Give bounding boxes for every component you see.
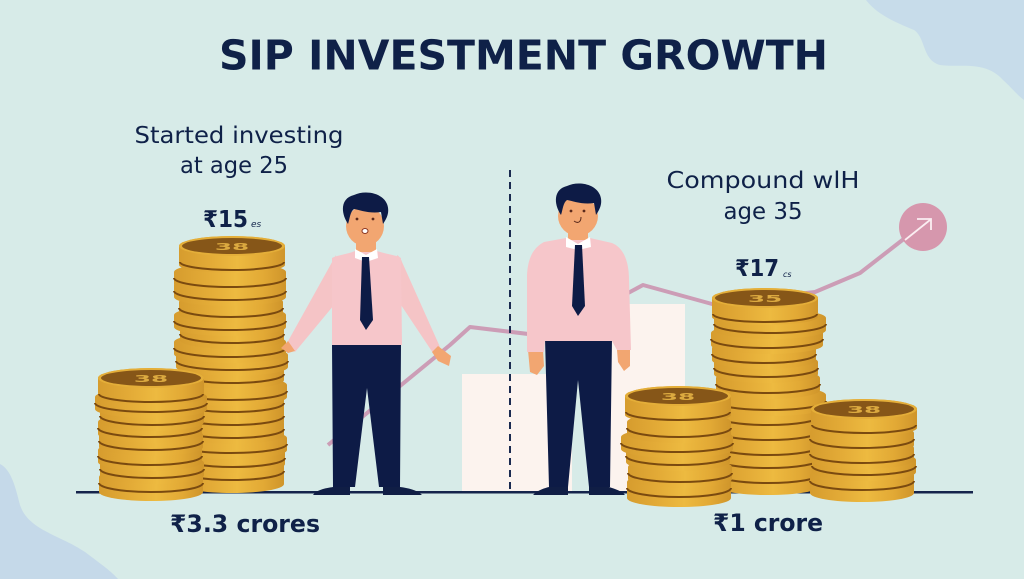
left panel caption: Started investing [134, 123, 344, 149]
face [346, 206, 384, 246]
neck and collar [356, 240, 376, 252]
shirt [527, 238, 631, 352]
right panel caption: age 35 [724, 199, 802, 225]
coin numeral: 35 [748, 294, 782, 305]
tie [572, 245, 585, 316]
right panel caption: Compound wlH [666, 168, 860, 194]
hands [528, 350, 630, 375]
eyes and mouth [356, 218, 358, 220]
trousers [545, 338, 612, 487]
shoes [533, 487, 625, 495]
face [558, 196, 598, 236]
person: right investor [527, 183, 631, 495]
trousers [332, 344, 401, 487]
tie [360, 257, 373, 330]
right amount label: ₹17 [735, 256, 779, 282]
right panel caption [666, 168, 860, 225]
right total label: ₹1 crore [713, 509, 823, 537]
bar chart backdrop [462, 304, 685, 491]
right amount label: cs [783, 270, 792, 279]
left amount label: es [251, 220, 262, 230]
coin stack: right small [810, 399, 917, 502]
title: SIP INVESTMENT GROWTH [219, 32, 828, 80]
hands [281, 341, 451, 366]
left amount label: ₹15 [203, 207, 248, 233]
icon: arrow circle [899, 203, 947, 251]
baseline [76, 491, 973, 494]
coin stack: right left [621, 386, 733, 507]
coin numeral: 38 [215, 242, 249, 253]
divider: dashed [509, 170, 511, 491]
arms [287, 255, 440, 353]
person: left investor [281, 192, 451, 495]
coin numeral: 38 [661, 392, 695, 403]
neck and collar [568, 228, 588, 240]
hair [556, 183, 601, 215]
coin numeral: 38 [134, 374, 168, 385]
decorative blob: bottom left [0, 464, 118, 579]
coin stack: right tall [711, 288, 826, 495]
growth trend line with arrow [328, 203, 947, 445]
eyes and mouth [570, 210, 572, 212]
coin stack: left tall [174, 236, 288, 493]
left panel caption: at age 25 [180, 153, 288, 179]
shoes [313, 487, 422, 495]
decorative blob: top right [866, 0, 1024, 100]
coin numeral: 38 [847, 405, 881, 416]
hair [343, 192, 388, 224]
shirt [332, 251, 402, 345]
left panel caption [134, 123, 344, 179]
coin stack: left short [95, 368, 207, 501]
left total label: ₹3.3 crores [170, 510, 320, 538]
